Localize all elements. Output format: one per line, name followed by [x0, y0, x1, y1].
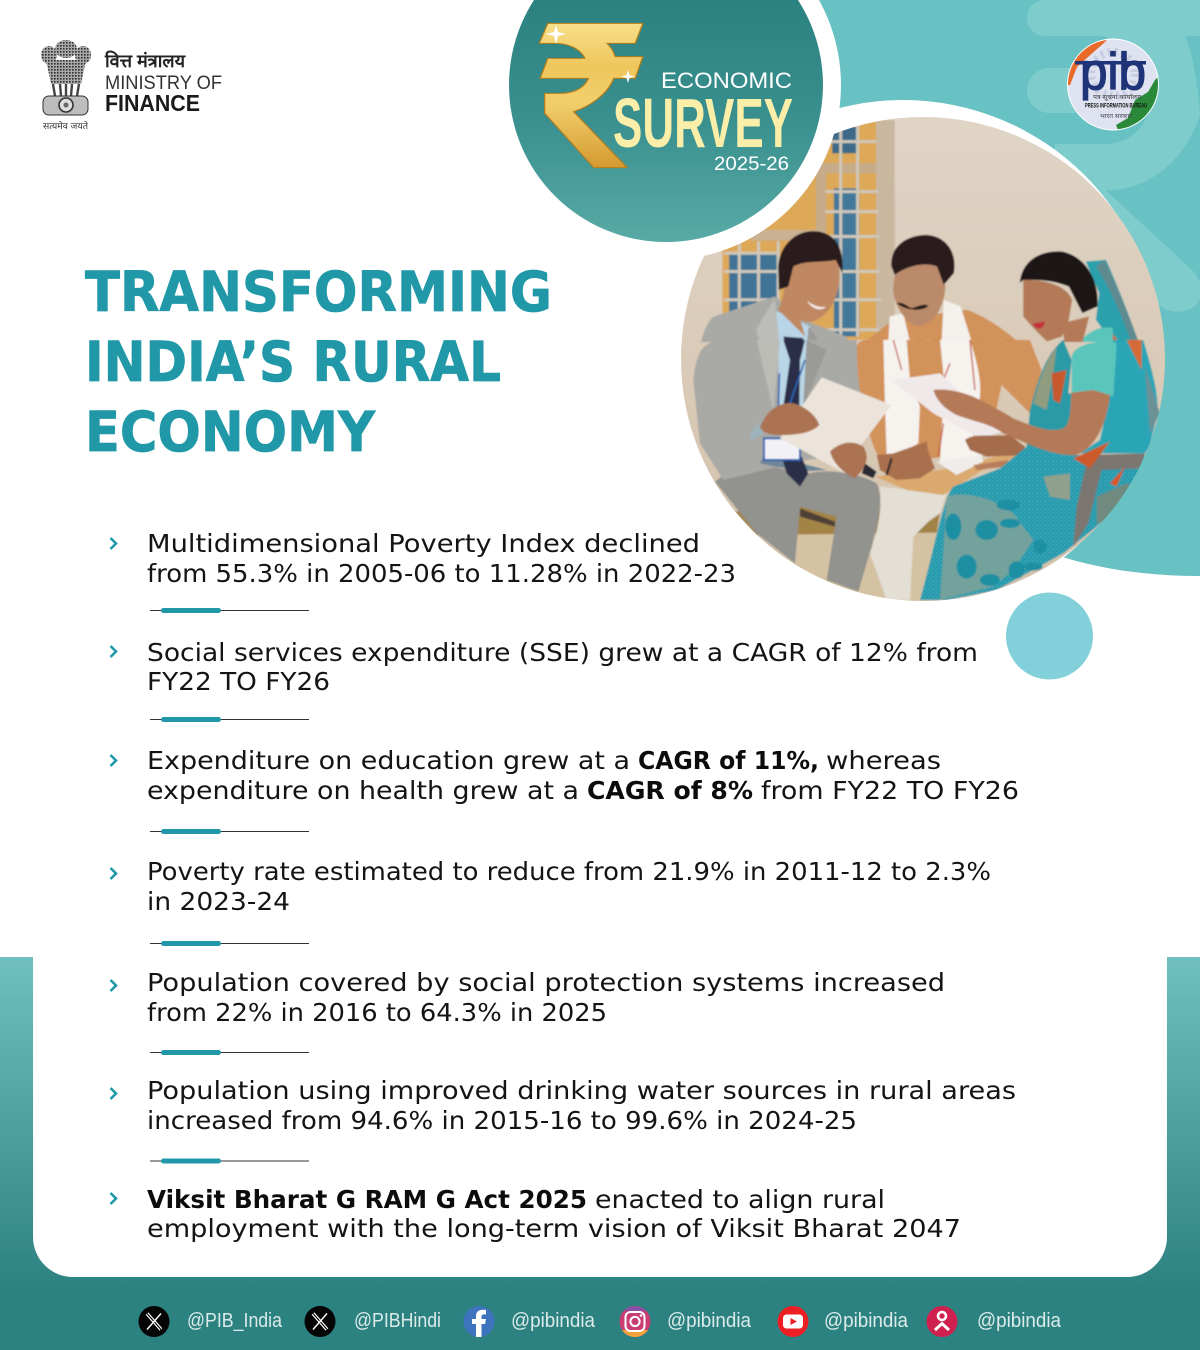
bullet 2: Social services expenditure (SSE) grew at a CAGR of 12% from — [147, 638, 978, 667]
divider 6 — [150, 1158, 309, 1164]
logo: Press Information Bureau: pib — [1080, 43, 1146, 101]
bullet 3: CAGR of 8% — [587, 776, 753, 805]
white ring behind photo — [646, 100, 1160, 614]
bullet 3: CAGR of 11%, — [638, 746, 819, 775]
divider 1 — [150, 608, 309, 613]
bullet 3: expenditure on health grew at a — [147, 776, 579, 805]
photo accent circle — [1006, 592, 1093, 680]
bullet 6 — [110, 1076, 1016, 1135]
bullet 5: Population covered by social protection systems increased — [147, 968, 945, 997]
handle: youtube: @pibindia — [824, 1310, 909, 1332]
panel: top right teal blob — [800, 0, 1200, 576]
bullet 4: in 2023-24 — [147, 887, 290, 916]
icon: koo — [926, 1306, 958, 1337]
bullet 7: employment with the long-term vision of Viksit Bharat 2047 — [147, 1214, 961, 1243]
bullet 1: Multidimensional Poverty Index declined — [147, 529, 700, 558]
bullet 5: from 22% in 2016 to 64.3% in 2025 — [147, 998, 607, 1027]
panel: white content card — [33, 900, 1167, 1277]
icon: instagram — [620, 1306, 650, 1337]
bullet 6: Population using improved drinking water sources in rural areas — [147, 1076, 1016, 1105]
logo: Press Information Bureau: पत्र सूचना कार्यालय — [1093, 93, 1142, 101]
badge label: survey: SURVEY — [613, 84, 793, 162]
handle: instagram: @pibindia — [667, 1310, 752, 1332]
handle: PIBHindi: @PIBHindi — [354, 1310, 441, 1332]
bullet 5 — [110, 968, 945, 1027]
divider 5 — [150, 1050, 309, 1055]
finance: FINANCE — [105, 90, 200, 116]
bullet 3: from FY22 TO FY26 — [761, 776, 1019, 805]
photo: three villagers reviewing documents — [680, 115, 1170, 605]
bullet 2 — [110, 638, 978, 696]
bullet 2: FY22 TO FY26 — [147, 667, 330, 696]
icon: facebook — [464, 1306, 494, 1337]
handle: PIB_India: @PIB_India — [187, 1310, 283, 1332]
bullet 7 — [110, 1185, 961, 1243]
icon: gold rupee symbol — [539, 23, 643, 168]
bullet 3: whereas — [826, 746, 941, 775]
handle: koo: @pibindia — [977, 1310, 1062, 1332]
title: INDIA’S RURAL — [85, 330, 501, 394]
decorative rupee watermark — [1027, 0, 1200, 312]
bullet 4: Poverty rate estimated to reduce from 21.9% in 2011-12 to 2.3% — [147, 857, 991, 886]
icon: X hindi — [304, 1306, 336, 1337]
photo: lower half of the figures — [693, 340, 1160, 603]
logo: Press Information Bureau: भारत सरकार — [1100, 114, 1133, 120]
bullet 6: increased from 94.6% in 2015-16 to 99.6% in 2024-25 — [147, 1106, 857, 1135]
bullet 3: Expenditure on education grew at a — [147, 746, 630, 775]
bullet 1 — [110, 529, 736, 588]
logo: Press Information Bureau — [1067, 38, 1159, 130]
title: ECONOMY — [85, 400, 376, 464]
handle: facebook: @pibindia — [511, 1310, 596, 1332]
bullet 7: enacted to align rural — [595, 1185, 885, 1214]
motto: सत्यमेव जयते — [43, 120, 89, 131]
divider 3 — [150, 829, 309, 834]
bullet 3 — [110, 746, 1019, 805]
bullet 7: Viksit Bharat G RAM G Act 2025 — [147, 1185, 587, 1214]
bullet 1: from 55.3% in 2005-06 to 11.28% in 2022-23 — [147, 559, 736, 588]
badge label: economic: ECONOMIC — [661, 68, 792, 93]
divider 4 — [150, 941, 309, 946]
bullet 4 — [110, 857, 991, 916]
footer: social handles — [138, 1306, 1062, 1337]
ministry name hindi: वित्त मंत्रालय — [104, 50, 187, 71]
logo: Press Information Bureau: PRESS INFORMATION BUREAU — [1085, 102, 1147, 110]
panel: lower teal gradient band — [0, 957, 1200, 1350]
title — [85, 260, 552, 464]
icon: X — [138, 1306, 170, 1337]
icon: youtube — [778, 1306, 808, 1337]
white ring of Economic Survey badge — [491, 0, 841, 260]
badge label: year: 2025-26 — [714, 154, 789, 175]
divider 2 — [150, 717, 309, 722]
logo: Ministry of Finance — [41, 40, 222, 131]
title: TRANSFORMING — [85, 260, 552, 324]
Economic Survey badge — [509, 0, 823, 242]
ministry name english: MINISTRY OF — [105, 72, 222, 94]
icon: national emblem — [41, 40, 91, 115]
